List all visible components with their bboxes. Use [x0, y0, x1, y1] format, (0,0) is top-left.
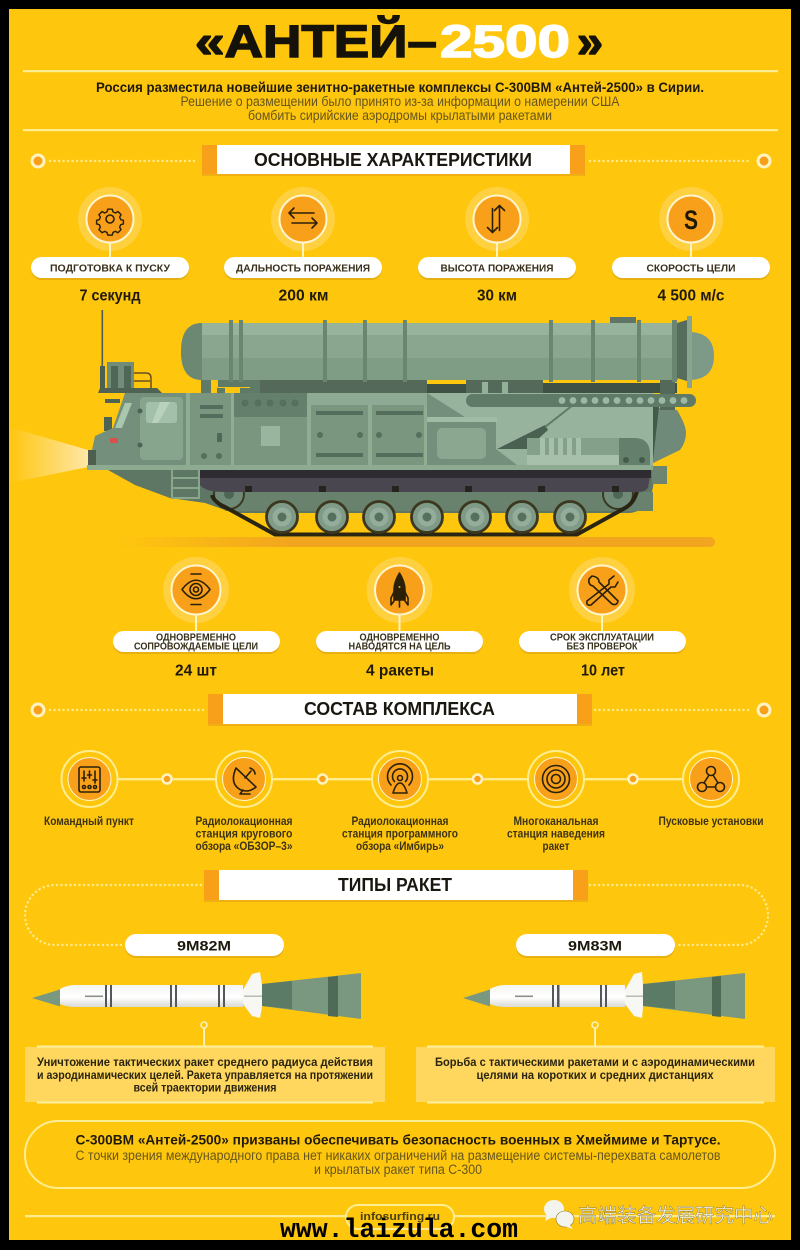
section heading: main characteristics	[32, 145, 770, 176]
connector	[201, 1022, 207, 1046]
stat: target speed	[612, 187, 770, 304]
stat: launch preparation: 7 секунд	[80, 288, 140, 304]
icon: eye	[182, 574, 210, 604]
section heading: composition: СОСТАВ КОМПЛЕКСА	[304, 699, 495, 719]
item: command post: Командный пункт	[44, 816, 134, 828]
chain nodes	[162, 774, 638, 784]
stat: target speed: 4 500 м/с	[658, 288, 725, 304]
main body panels	[190, 393, 653, 465]
item: launchers	[658, 751, 764, 828]
missile panel: 9M82M: всей траектории движения	[134, 1082, 276, 1094]
title: »	[577, 16, 603, 67]
item: OBZOR-3 radar: станция кругового	[196, 828, 292, 840]
composition chain	[44, 751, 764, 853]
title: 2500	[440, 16, 570, 67]
watermark: WeChat channel: 高端装备发展研究中心	[578, 1199, 773, 1228]
crawler track	[212, 491, 637, 534]
missile 9M83M illustration	[463, 972, 745, 1019]
dark skirt	[200, 470, 651, 492]
hull lower	[108, 470, 654, 513]
item: guidance station	[507, 751, 605, 853]
missile 9M82M illustration	[32, 972, 361, 1019]
connector	[592, 1022, 598, 1046]
intro text block: Россия разместила новейшие зенитно-ракетные комплексы С-300ВМ «Антей-2500» в Сирии.	[96, 79, 704, 95]
stat: range: ДАЛЬНОСТЬ ПОРАЖЕНИЯ	[236, 262, 370, 274]
ladder	[172, 470, 199, 498]
conclusion callout	[25, 1121, 775, 1188]
item: guidance station: ракет	[542, 841, 570, 853]
section heading: composition	[32, 694, 770, 726]
item: OBZOR-3 radar: обзора «ОБЗОР–3»	[196, 841, 292, 853]
description box	[25, 1047, 385, 1102]
stat: service life: 10 лет	[581, 662, 625, 680]
missile panel: 9M83M: 9М83М	[568, 938, 622, 954]
stat: service life	[519, 557, 686, 680]
stat: service life: СРОК ЭКСПЛУАТАЦИИ	[550, 632, 654, 644]
item: guidance station: Многоканальная	[514, 816, 598, 828]
missile panel: 9M82M	[25, 934, 385, 1104]
idler wheels	[214, 479, 633, 509]
ground shadow	[115, 537, 715, 547]
stat: launch preparation	[31, 187, 189, 304]
item: OBZOR-3 radar	[196, 751, 292, 853]
section heading: missile types: ТИПЫ РАКЕТ	[338, 875, 452, 895]
item: OBZOR-3 radar: Радиолокационная	[196, 816, 292, 828]
belt with dots	[466, 394, 696, 407]
conclusion callout: и крылатых ракет типа С-300	[314, 1162, 482, 1177]
missile panel: 9M82M: 9М82М	[177, 938, 231, 954]
stat: altitude	[418, 187, 576, 304]
conclusion callout: С точки зрения международного права нет никаких ограничений на размещение системы-перехвата самолетов	[76, 1148, 720, 1163]
intro text block: бомбить сирийские аэродромы крылатыми ракетами	[248, 108, 552, 123]
stat: altitude: ВЫСОТА ПОРАЖЕНИЯ	[440, 262, 554, 274]
item: command post	[44, 751, 134, 828]
missile panel: 9M83M	[416, 934, 775, 1104]
conclusion callout: С-300ВМ «Антей-2500» призваны обеспечивать безопасность военных в Хмеймиме и Тартусе.	[76, 1132, 720, 1148]
intro text block: Решение о размещении было принято из-за информации о намерении США	[180, 94, 620, 109]
item: Imbir radar: станция программного	[342, 828, 458, 840]
section heading: main characteristics: ОСНОВНЫЕ ХАРАКТЕРИСТИКИ	[254, 150, 532, 170]
stat: range: 200 км	[278, 288, 328, 304]
item: Imbir radar: обзора «Имбирь»	[356, 841, 444, 853]
stat: target speed: СКОРОСТЬ ЦЕЛИ	[646, 262, 736, 274]
title	[195, 16, 603, 67]
stat: service life: БЕЗ ПРОВЕРОК	[566, 642, 638, 652]
stat: tracked targets: 24 шт	[175, 662, 217, 680]
footer source: infosurfing.ru	[360, 1211, 440, 1223]
description box	[416, 1047, 775, 1102]
headlight beam	[9, 427, 88, 483]
item: launchers: Пусковые установки	[658, 816, 764, 828]
stat: altitude: 30 км	[477, 288, 517, 304]
icon: horizontal arrows	[289, 208, 317, 228]
icon: chat bubbles	[544, 1200, 574, 1229]
icon: crossed wrenches	[587, 576, 618, 605]
icon: rocket	[391, 573, 408, 607]
rear bumper and hull	[652, 466, 667, 484]
icon: letter S: S	[684, 205, 698, 235]
item: guidance station: станция наведения	[507, 828, 605, 840]
stat: tracked targets: ОДНОВРЕМЕННО	[156, 632, 236, 644]
item: Imbir radar: Радиолокационная	[352, 816, 448, 828]
illustration: S-300VM launcher vehicle	[87, 310, 714, 534]
icon: vertical arrows	[488, 206, 504, 232]
missile panel: 9M82M: Уничтожение тактических ракет среднего радиуса действия	[37, 1057, 373, 1069]
stat: range	[224, 187, 382, 304]
intro text block	[23, 70, 778, 131]
missile panel: 9M83M: Борьба с тактическими ракетами и с аэродинамическими	[435, 1057, 755, 1069]
section heading: missile types	[25, 870, 768, 945]
antenna and sensor	[98, 310, 162, 431]
icon: gear	[97, 209, 123, 235]
title: «АНТЕЙ–	[195, 16, 437, 67]
missile supports	[201, 380, 677, 410]
rear section	[427, 393, 653, 465]
missile panel: 9M83M: целями на коротких и средних дистанциях	[476, 1070, 714, 1082]
stat: launch preparation: ПОДГОТОВКА К ПУСКУ	[50, 262, 170, 274]
stat: guided missiles	[316, 557, 483, 680]
stat: guided missiles: 4 ракеты	[366, 662, 434, 680]
footer source	[25, 1205, 775, 1229]
watermark: site address: www.laizula.com	[280, 1215, 518, 1245]
stat: guided missiles: НАВОДЯТСЯ НА ЦЕЛЬ	[348, 642, 450, 652]
road wheels	[266, 502, 586, 532]
item: Imbir radar	[342, 751, 458, 853]
stat: tracked targets: СОПРОВОЖДАЕМЫЕ ЦЕЛИ	[134, 642, 258, 652]
missile panel: 9M82M: и аэродинамических целей. Ракета управляется на протяжении	[37, 1070, 373, 1082]
launcher tube	[181, 316, 714, 388]
cab	[88, 393, 190, 465]
stat: tracked targets	[113, 557, 280, 680]
stat: guided missiles: ОДНОВРЕМЕННО	[360, 632, 440, 644]
deck rail	[87, 465, 653, 470]
